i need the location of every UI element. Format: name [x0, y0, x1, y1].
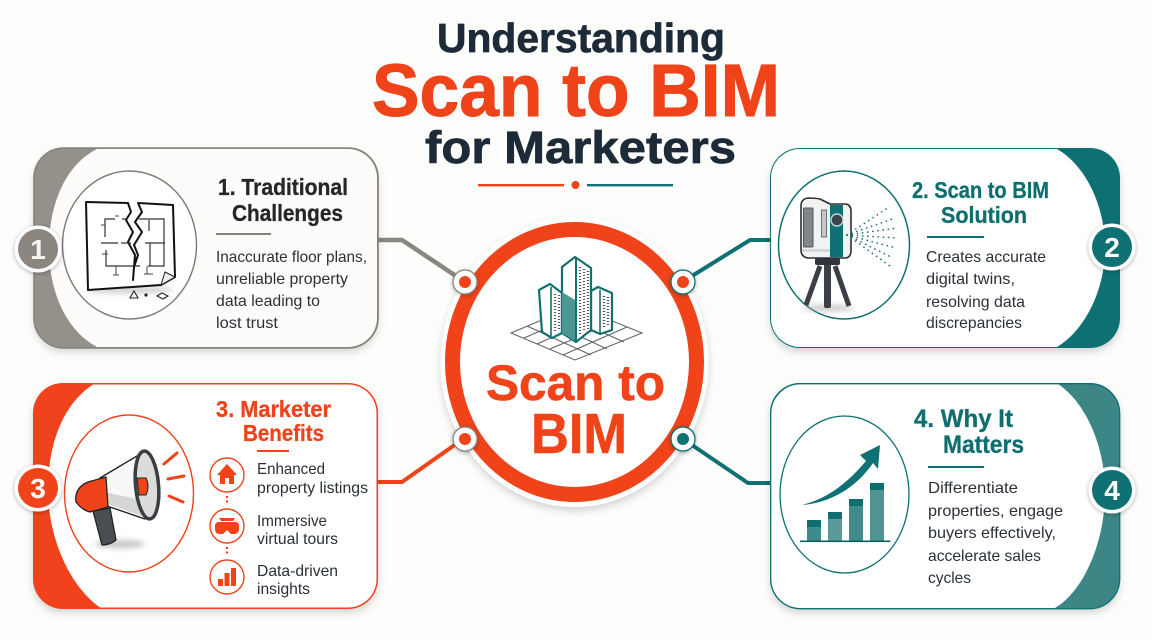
connector: card 1 to hub: [378, 240, 456, 276]
body text: buyers effectively,: [928, 525, 1056, 542]
body text: Differentiate: [928, 480, 1018, 497]
heading rule: [216, 233, 271, 235]
body text: data leading to: [216, 293, 320, 310]
connector: card 4 to hub: [692, 445, 770, 483]
benefit text: virtual tours: [257, 531, 338, 548]
benefit text: [257, 461, 368, 598]
icon circle: growth chart: [780, 416, 909, 573]
icon: bars: [210, 560, 244, 594]
benefit text: Immersive: [257, 513, 327, 530]
body text: [216, 249, 367, 332]
badge 1: [14, 226, 62, 272]
badge 2: 2: [1104, 232, 1120, 263]
badge 1: 1: [30, 234, 46, 265]
badge 3: 3: [30, 473, 46, 504]
hub label: Scan to: [486, 355, 665, 411]
node: top left: [453, 270, 477, 294]
title: Understanding: [437, 15, 725, 61]
heading: Solution: [941, 202, 1027, 228]
building: tall: [562, 257, 591, 342]
icon circle: megaphone: [64, 415, 194, 572]
heading rule: [927, 236, 984, 238]
arrow: upward trend: [802, 445, 880, 505]
central hub: [440, 217, 708, 507]
panel: marketer benefits: [33, 383, 378, 609]
hub label: [486, 355, 665, 466]
icon: VR headset: [210, 509, 244, 543]
body text: Creates accurate: [926, 249, 1046, 266]
icon circle: laser scanner: [778, 171, 910, 319]
icon: house: [210, 458, 244, 492]
title divider: [478, 181, 673, 189]
body text: Inaccurate floor plans,: [216, 249, 367, 266]
heading: Benefits: [243, 420, 324, 446]
title: [372, 15, 780, 173]
body text: resolving data: [926, 294, 1025, 311]
benefit text: Data-driven: [257, 563, 338, 580]
title: for Marketers: [425, 122, 736, 173]
connector: card 3 to hub: [378, 444, 456, 482]
heading: [914, 405, 1024, 459]
body text: unreliable property: [216, 271, 348, 288]
benefit text: Enhanced: [257, 461, 325, 478]
node: bottom left: [453, 427, 477, 451]
title: Scan to BIM: [372, 49, 780, 132]
heading: [912, 177, 1049, 228]
panel: why it matters: [770, 383, 1120, 609]
heading: 3. Marketer: [216, 396, 331, 422]
heading: 1. Traditional: [218, 174, 348, 200]
benefit text: insights: [257, 581, 310, 598]
heading rule: [928, 466, 984, 468]
panel: traditional challenges: [34, 148, 378, 348]
body text: properties, engage: [928, 503, 1063, 520]
icon circle: torn floor plan: [62, 171, 196, 319]
icon: city on grid: [511, 257, 642, 360]
badge 2: [1088, 224, 1136, 270]
heading rule: [257, 450, 289, 452]
heading: Matters: [943, 431, 1024, 459]
heading: [218, 174, 348, 226]
node: bottom right: [671, 427, 695, 451]
building: left: [539, 284, 562, 338]
node: top right: [671, 270, 695, 294]
heading: 4. Why It: [914, 405, 1014, 433]
benefit icons: [210, 458, 244, 594]
body text: accelerate sales: [928, 548, 1041, 565]
badge 3: [14, 464, 62, 512]
body text: cycles: [928, 570, 971, 587]
body text: [926, 249, 1046, 332]
connector: card 2 to hub: [692, 240, 770, 276]
hub label: BIM: [531, 402, 627, 466]
bar chart: [800, 483, 890, 542]
body text: digital twins,: [926, 271, 1015, 288]
body text: discrepancies: [926, 315, 1022, 332]
body text: [928, 480, 1063, 587]
heading: Challenges: [232, 200, 343, 226]
body text: lost trust: [216, 315, 279, 332]
heading: 2. Scan to BIM: [912, 177, 1049, 203]
badge 4: [1088, 466, 1136, 514]
badge 4: 4: [1104, 475, 1120, 506]
benefit text: property listings: [257, 480, 368, 497]
panel: scan to BIM solution: [770, 148, 1120, 348]
building: right: [591, 287, 612, 334]
heading: [216, 396, 331, 446]
